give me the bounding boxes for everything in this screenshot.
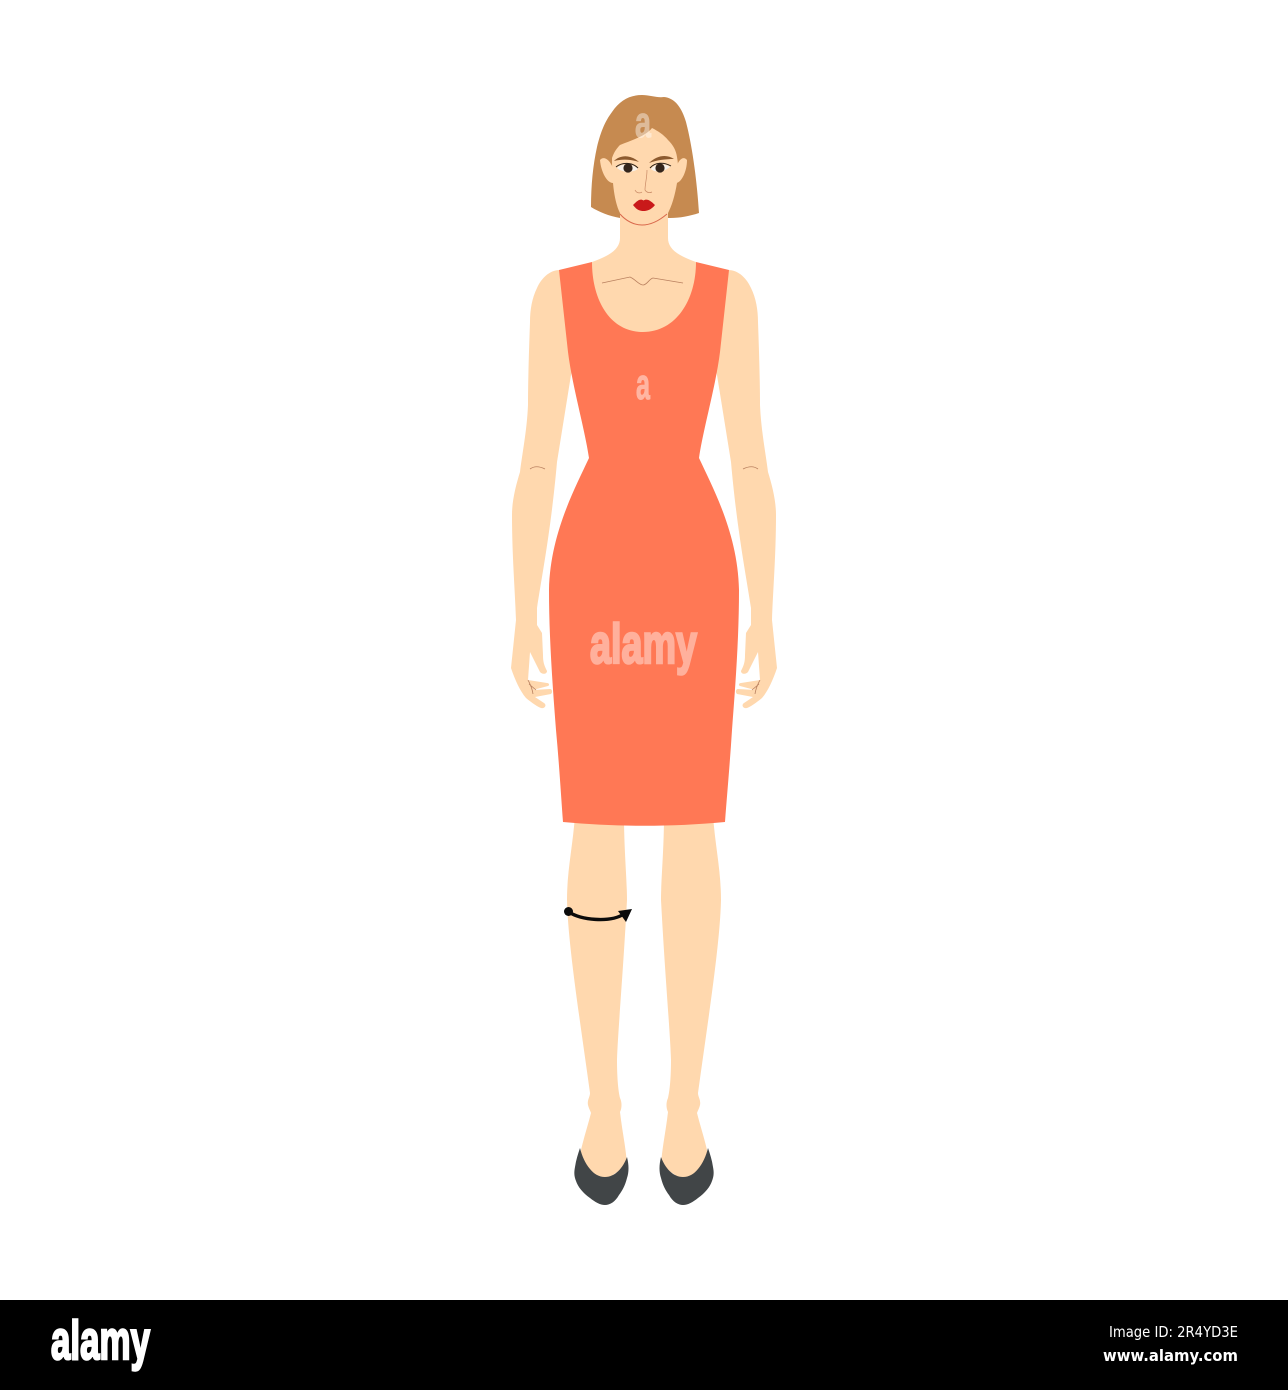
right leg xyxy=(661,815,721,1182)
footer logo: alamy xyxy=(51,1309,150,1371)
neck and chest xyxy=(585,210,703,340)
figure: woman in dress xyxy=(511,95,777,1205)
website: www.alamy.com xyxy=(1103,1346,1238,1365)
watermark: large alamy: alamy xyxy=(590,612,697,675)
face xyxy=(612,128,678,225)
footer bar xyxy=(0,1300,1288,1390)
watermark: hair: a xyxy=(635,98,651,147)
left leg xyxy=(567,815,627,1182)
dress xyxy=(549,262,739,826)
left shoe xyxy=(574,1148,628,1205)
ears xyxy=(600,158,687,183)
right shoe xyxy=(660,1148,714,1205)
collarbone line xyxy=(602,277,683,285)
facial features xyxy=(614,156,674,225)
watermark: small dress mark: a xyxy=(636,360,650,409)
hair xyxy=(591,95,699,218)
measurement arrow xyxy=(564,907,632,922)
right arm xyxy=(708,270,777,708)
image id: Image ID: 2R4YD3E xyxy=(1109,1323,1238,1341)
left arm xyxy=(511,270,580,708)
